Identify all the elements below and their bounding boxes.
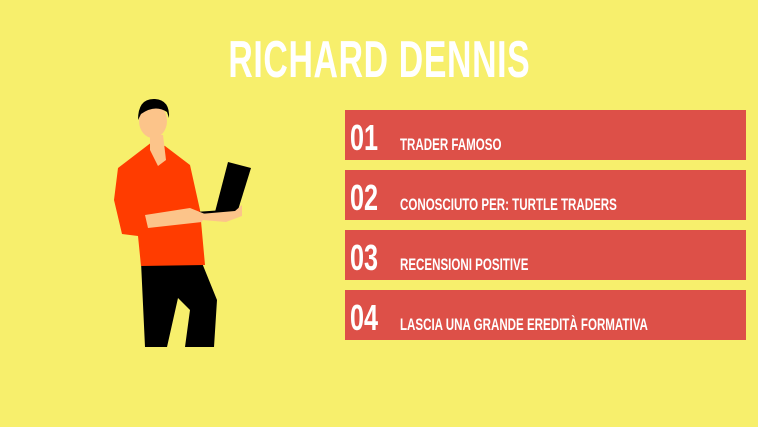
item 03: 03 <box>350 237 378 278</box>
item 04: LASCIA UNA GRANDE EREDITÀ FORMATIVA <box>400 315 648 334</box>
item 01 <box>345 110 746 160</box>
item 02: CONOSCIUTO PER: TURTLE TRADERS <box>400 195 617 214</box>
item 02: 02 <box>350 177 378 218</box>
item 03 <box>345 230 746 280</box>
item 03: RECENSIONI POSITIVE <box>400 255 528 274</box>
item 04 <box>345 290 746 340</box>
item 01: 01 <box>350 117 378 158</box>
item 01: TRADER FAMOSO <box>400 135 501 154</box>
item 04: 04 <box>350 297 378 338</box>
item 02 <box>345 170 746 220</box>
title: RICHARD DENNIS <box>228 31 530 89</box>
